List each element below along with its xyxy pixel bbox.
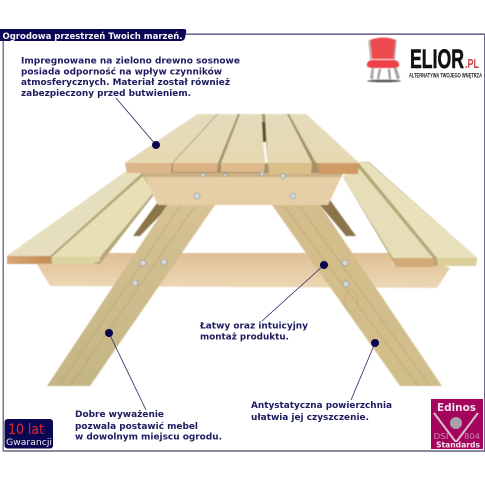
callout: wood: Impregnowane na zielono drewno sosnowe xyxy=(21,56,240,66)
icon: red chair xyxy=(367,38,401,82)
badge: Edinos standards: Standards xyxy=(436,440,481,450)
right bench xyxy=(343,162,477,267)
apron xyxy=(143,173,343,205)
callout: antistatic: Antystatyczna powierzchnia xyxy=(251,401,392,411)
crossbeam xyxy=(37,253,450,288)
badge: Edinos standards: 804 xyxy=(464,432,480,441)
callout: balance xyxy=(75,329,222,442)
table top planks xyxy=(125,114,359,174)
badge: 10 lat warranty: 10 lat xyxy=(8,422,44,438)
callout: assembly: Łatwy oraz intuicyjny xyxy=(199,322,308,332)
badge: 10 lat warranty xyxy=(4,419,53,448)
badge: Edinos standards xyxy=(431,399,483,450)
callout: wood: zabezpieczony przed butwieniem. xyxy=(21,89,191,99)
bolts xyxy=(132,172,349,287)
callout: balance: pozwala postawić mebel xyxy=(75,421,198,432)
left bench xyxy=(7,172,153,264)
title bar: Ogrodowa przestrzeń Twoich marzeń. xyxy=(2,32,182,42)
callout: antistatic: ułatwia jej czyszczenie. xyxy=(251,413,369,423)
logo: Elior: .PL xyxy=(465,56,479,71)
badge: Edinos standards: DSI xyxy=(434,432,448,441)
logo: Elior xyxy=(367,38,482,82)
callout: balance: Dobre wyważenie xyxy=(75,410,164,420)
callout: wood xyxy=(21,56,240,149)
badge: 10 lat warranty: Gwarancji xyxy=(6,438,52,448)
back legs xyxy=(133,200,356,236)
callout: assembly: montaż produktu. xyxy=(200,332,289,342)
callout: antistatic xyxy=(251,339,392,423)
callout: assembly xyxy=(199,261,328,342)
callout: wood: atmosferycznych. Materiał został również xyxy=(21,77,230,88)
picnic table photo xyxy=(7,114,477,386)
callout: balance: w dowolnym miejscu ogrodu. xyxy=(75,432,222,442)
front legs xyxy=(47,205,442,386)
callout: wood: posiada odporność na wpływ czynników xyxy=(21,66,222,78)
badge: Edinos standards: Edinos xyxy=(437,402,476,414)
